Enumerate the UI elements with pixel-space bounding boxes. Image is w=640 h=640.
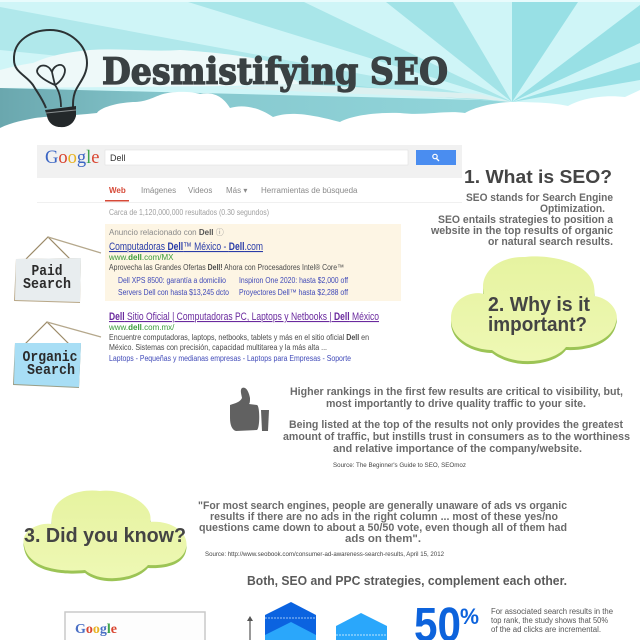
importance text: most importantly to drive quality traffic to your site. [326,398,586,410]
paid ad box: Dell XPS 8500: garantía a domicilio [118,276,226,285]
organic result: Encuentre computadoras, laptops, netbooks, tablets y más en el sitio oficial Dell en [109,333,369,342]
hanging sign: paid search [14,237,101,303]
section 1: what is seo [430,166,614,248]
search tabs: Imágenes [141,186,176,195]
paid ad box: Servers Dell con hasta $13,245 dcto [118,288,229,297]
panel: google search results [37,145,462,363]
paid ad box: Proyectores Dell™ hasta $2,288 off [239,288,349,297]
cloud callout: did you know: 3. Did you know? [24,525,186,547]
header banner with sun rays [0,0,640,130]
seo definition text: SEO stands for Search Engine [466,192,613,204]
paid ad box: Anuncio relacionado con Dell ⓘ [109,228,224,237]
seo definition text: or natural search results. [488,236,613,248]
search header bar: Dell [110,153,126,163]
google logo: Google [45,148,99,168]
cloud callout: why is it important: important? [488,314,587,336]
organic result: Laptops - Pequeñas y medianas empresas - Laptops para Empresas - Soporte [109,354,351,363]
paid ad box: www.dell.com/MX [108,253,174,262]
stat description: top rank, the study shows that 50% [491,616,608,625]
seo definition text: Optimization. [540,203,605,215]
hanging sign: organic search: Organic [22,349,78,366]
cloud callout: did you know [23,491,187,581]
icon: light bulb [14,30,87,127]
search header bar [37,145,462,178]
importance text: and relative importance of the company/website. [333,443,582,455]
stat description: For associated search results in the [491,607,614,616]
search tabs [37,186,462,203]
hanging sign: organic search [13,322,101,388]
importance text: Being listed at the top of the results not only provides the greatest [289,419,623,431]
hanging sign: paid search: Paid [32,263,62,280]
importance text: amount of traffic, but instills trust in consumers as to the worthiness [283,431,630,443]
organic result: Dell Sitio Oficial | Computadoras PC, Laptops y Netbooks | Dell México [109,311,379,323]
paid ad box: Computadoras Dell™ México - Dell.com [109,241,263,253]
quote text: results if there are no ads in the right column ... most of these yes/no [210,511,558,523]
stat description [491,607,614,634]
icon: thumbs up [230,388,269,431]
importance text [283,386,630,469]
result count: Carca de 1,120,000,000 resultados (0.30 segundos) [109,208,269,217]
quote text [198,500,567,558]
search tabs: Web [109,186,126,195]
heading 1: 1. What is SEO? [464,166,612,187]
organic result: México. Sistemas con precisión, capacidad multitarea y la más alta ... [109,343,327,352]
big stat: 50 percent: % [460,604,479,629]
google results thumbnail: Google [75,622,117,637]
search tabs: Más ▾ [226,186,247,195]
stat description: of the ad clicks are incremental. [491,625,601,634]
complement heading: Both, SEO and PPC strategies, complement each other. [247,573,567,588]
quote text: "For most search engines, people are generally unaware of ads vs organic [198,500,567,512]
hanging sign: paid search: Search [23,276,71,293]
cloud callout: why is it important [451,256,617,364]
paid ad box: Inspiron One 2020: hasta $2,000 off [239,276,349,285]
arrow: rank axis [247,616,253,640]
hanging sign: organic search: Search [27,362,75,379]
search tabs: Herramientas de búsqueda [261,186,358,195]
search tabs: Videos [188,186,212,195]
organic result [108,311,379,363]
organic result: www.dell.com.mx/ [108,323,175,332]
paid ad box: Aprovecha las Grandes Ofertas Dell! Ahora con Procesadores Intel® Core™ [109,263,344,272]
quote text: questions came down to about a 50/50 vote, even though all of them had [199,522,567,534]
google results thumbnail [65,612,205,640]
quote text: ads on them". [345,533,421,545]
bar: with ads [265,602,316,640]
importance text: Higher rankings in the first few results are critical to visibility, but, [290,386,623,398]
paid ad box [105,224,401,301]
seo definition text: website in the top results of organic [430,225,613,237]
cloud callout: why is it important: 2. Why is it [488,294,590,316]
white clouds under the banner [0,90,640,150]
source note: Source: The Beginner's Guide to SEO, SEOmoz [333,462,466,469]
seo definition text: SEO entails strategies to position a [438,214,614,226]
quote source: Source: http://www.seobook.com/consumer-ad-awareness-search-results, April 15, 2012 [205,552,445,558]
bar chart: click share houses [265,602,387,640]
title: Desmistifying SEO [102,51,448,93]
bar: without ads [336,613,387,640]
seo definition text [430,192,614,248]
